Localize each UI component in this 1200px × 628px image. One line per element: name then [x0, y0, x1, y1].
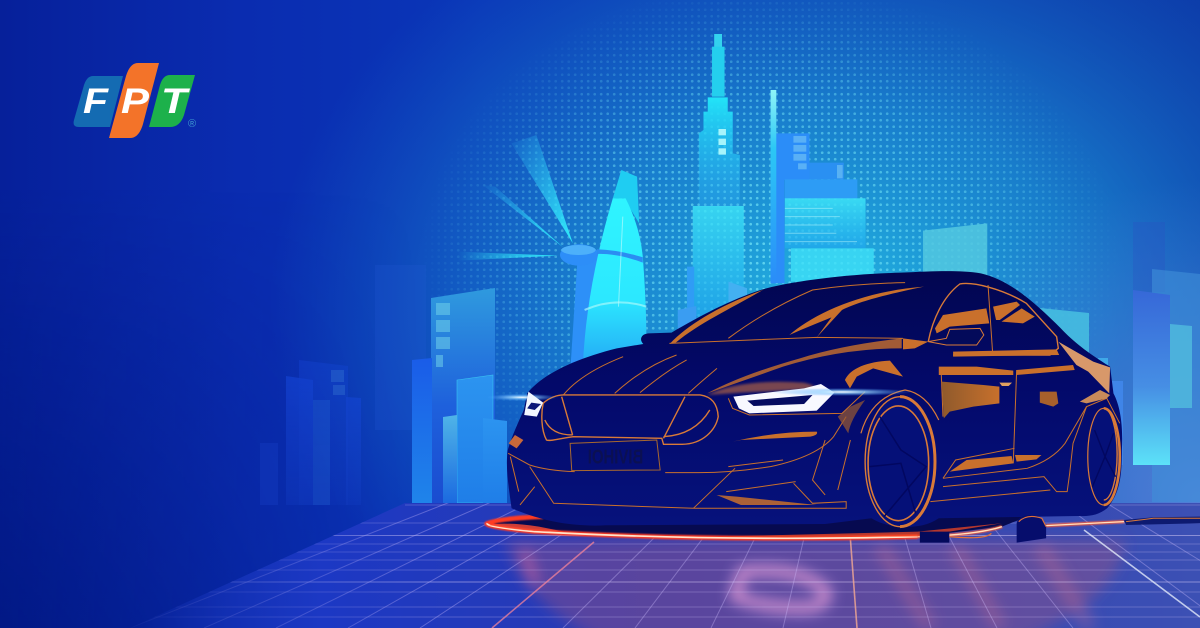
- door and fender reflections: [509, 342, 1110, 505]
- charger cable and plugs: [920, 515, 1200, 543]
- teal slanted building: [923, 223, 987, 277]
- grille: [542, 395, 718, 444]
- body contour lines: [508, 283, 1120, 508]
- front headlight: [728, 384, 914, 415]
- front wheel: [861, 390, 939, 527]
- registered mark: ®: [188, 118, 196, 130]
- central city skyline: [458, 34, 987, 367]
- faded buildings right: [1040, 222, 1200, 502]
- left headlight: [486, 392, 558, 417]
- floor grid: [134, 503, 1200, 628]
- windshield reflections: [670, 287, 928, 349]
- FPT logo: [74, 63, 196, 138]
- Landmark spire tower: [678, 34, 747, 330]
- rear wheel: [1088, 408, 1120, 505]
- stepped office tower: [771, 90, 874, 283]
- glowing charging ring: [487, 517, 1124, 538]
- electric car: [486, 271, 1200, 543]
- light beams: [458, 135, 573, 261]
- faded background buildings left: [260, 265, 426, 505]
- hood and shoulder highlight: [707, 338, 902, 393]
- Bitexco tower: [560, 170, 646, 367]
- licence plate: BIVIHOI: [588, 445, 643, 468]
- side window and mirror: [928, 284, 1059, 357]
- orange P tile: P: [121, 82, 150, 121]
- car body silhouette: [507, 271, 1122, 527]
- hood glow: [707, 382, 814, 395]
- car reflection on floor: [505, 540, 1125, 628]
- green T tile: T: [161, 82, 190, 121]
- blue F tile: F: [83, 82, 110, 121]
- buildings beside the car left: [412, 288, 507, 503]
- licence plate: [570, 440, 660, 471]
